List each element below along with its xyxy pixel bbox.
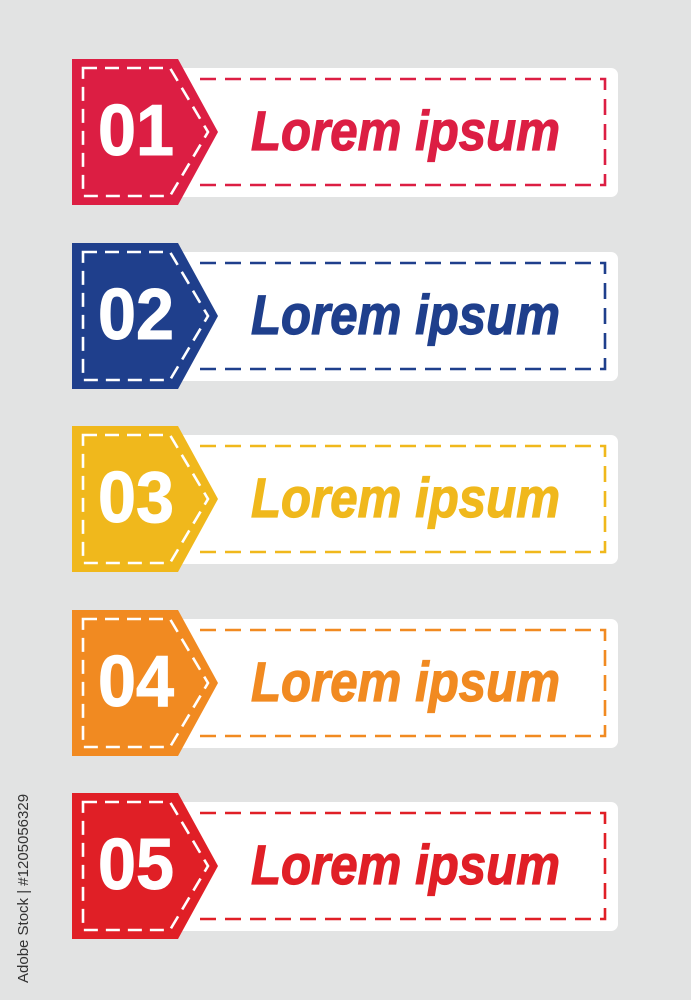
dashed frame	[200, 446, 605, 552]
number: 03	[98, 458, 174, 538]
number: 01	[98, 91, 174, 171]
number: 04	[98, 642, 174, 722]
label: Lorem ipsum	[251, 466, 560, 529]
label: Lorem ipsum	[251, 650, 560, 713]
white card	[170, 435, 618, 564]
dashed frame	[200, 263, 605, 369]
label: Lorem ipsum	[251, 833, 560, 896]
dashed frame	[200, 630, 605, 736]
row 04	[72, 610, 618, 756]
number badge	[72, 426, 218, 572]
number badge	[72, 610, 218, 756]
number badge	[72, 243, 218, 389]
row 05	[72, 793, 618, 939]
row 02	[72, 243, 618, 389]
label: Lorem ipsum	[251, 283, 560, 346]
dashed frame	[200, 813, 605, 919]
dashed frame	[200, 79, 605, 185]
watermark id: Adobe Stock | #1205056329	[15, 794, 32, 983]
row 01	[72, 59, 618, 205]
white card	[170, 802, 618, 931]
label: Lorem ipsum	[251, 99, 560, 162]
white card	[170, 252, 618, 381]
number badge	[72, 59, 218, 205]
number: 02	[98, 275, 174, 355]
number badge	[72, 793, 218, 939]
white card	[170, 619, 618, 748]
row 03	[72, 426, 618, 572]
white card	[170, 68, 618, 197]
number: 05	[98, 825, 174, 905]
